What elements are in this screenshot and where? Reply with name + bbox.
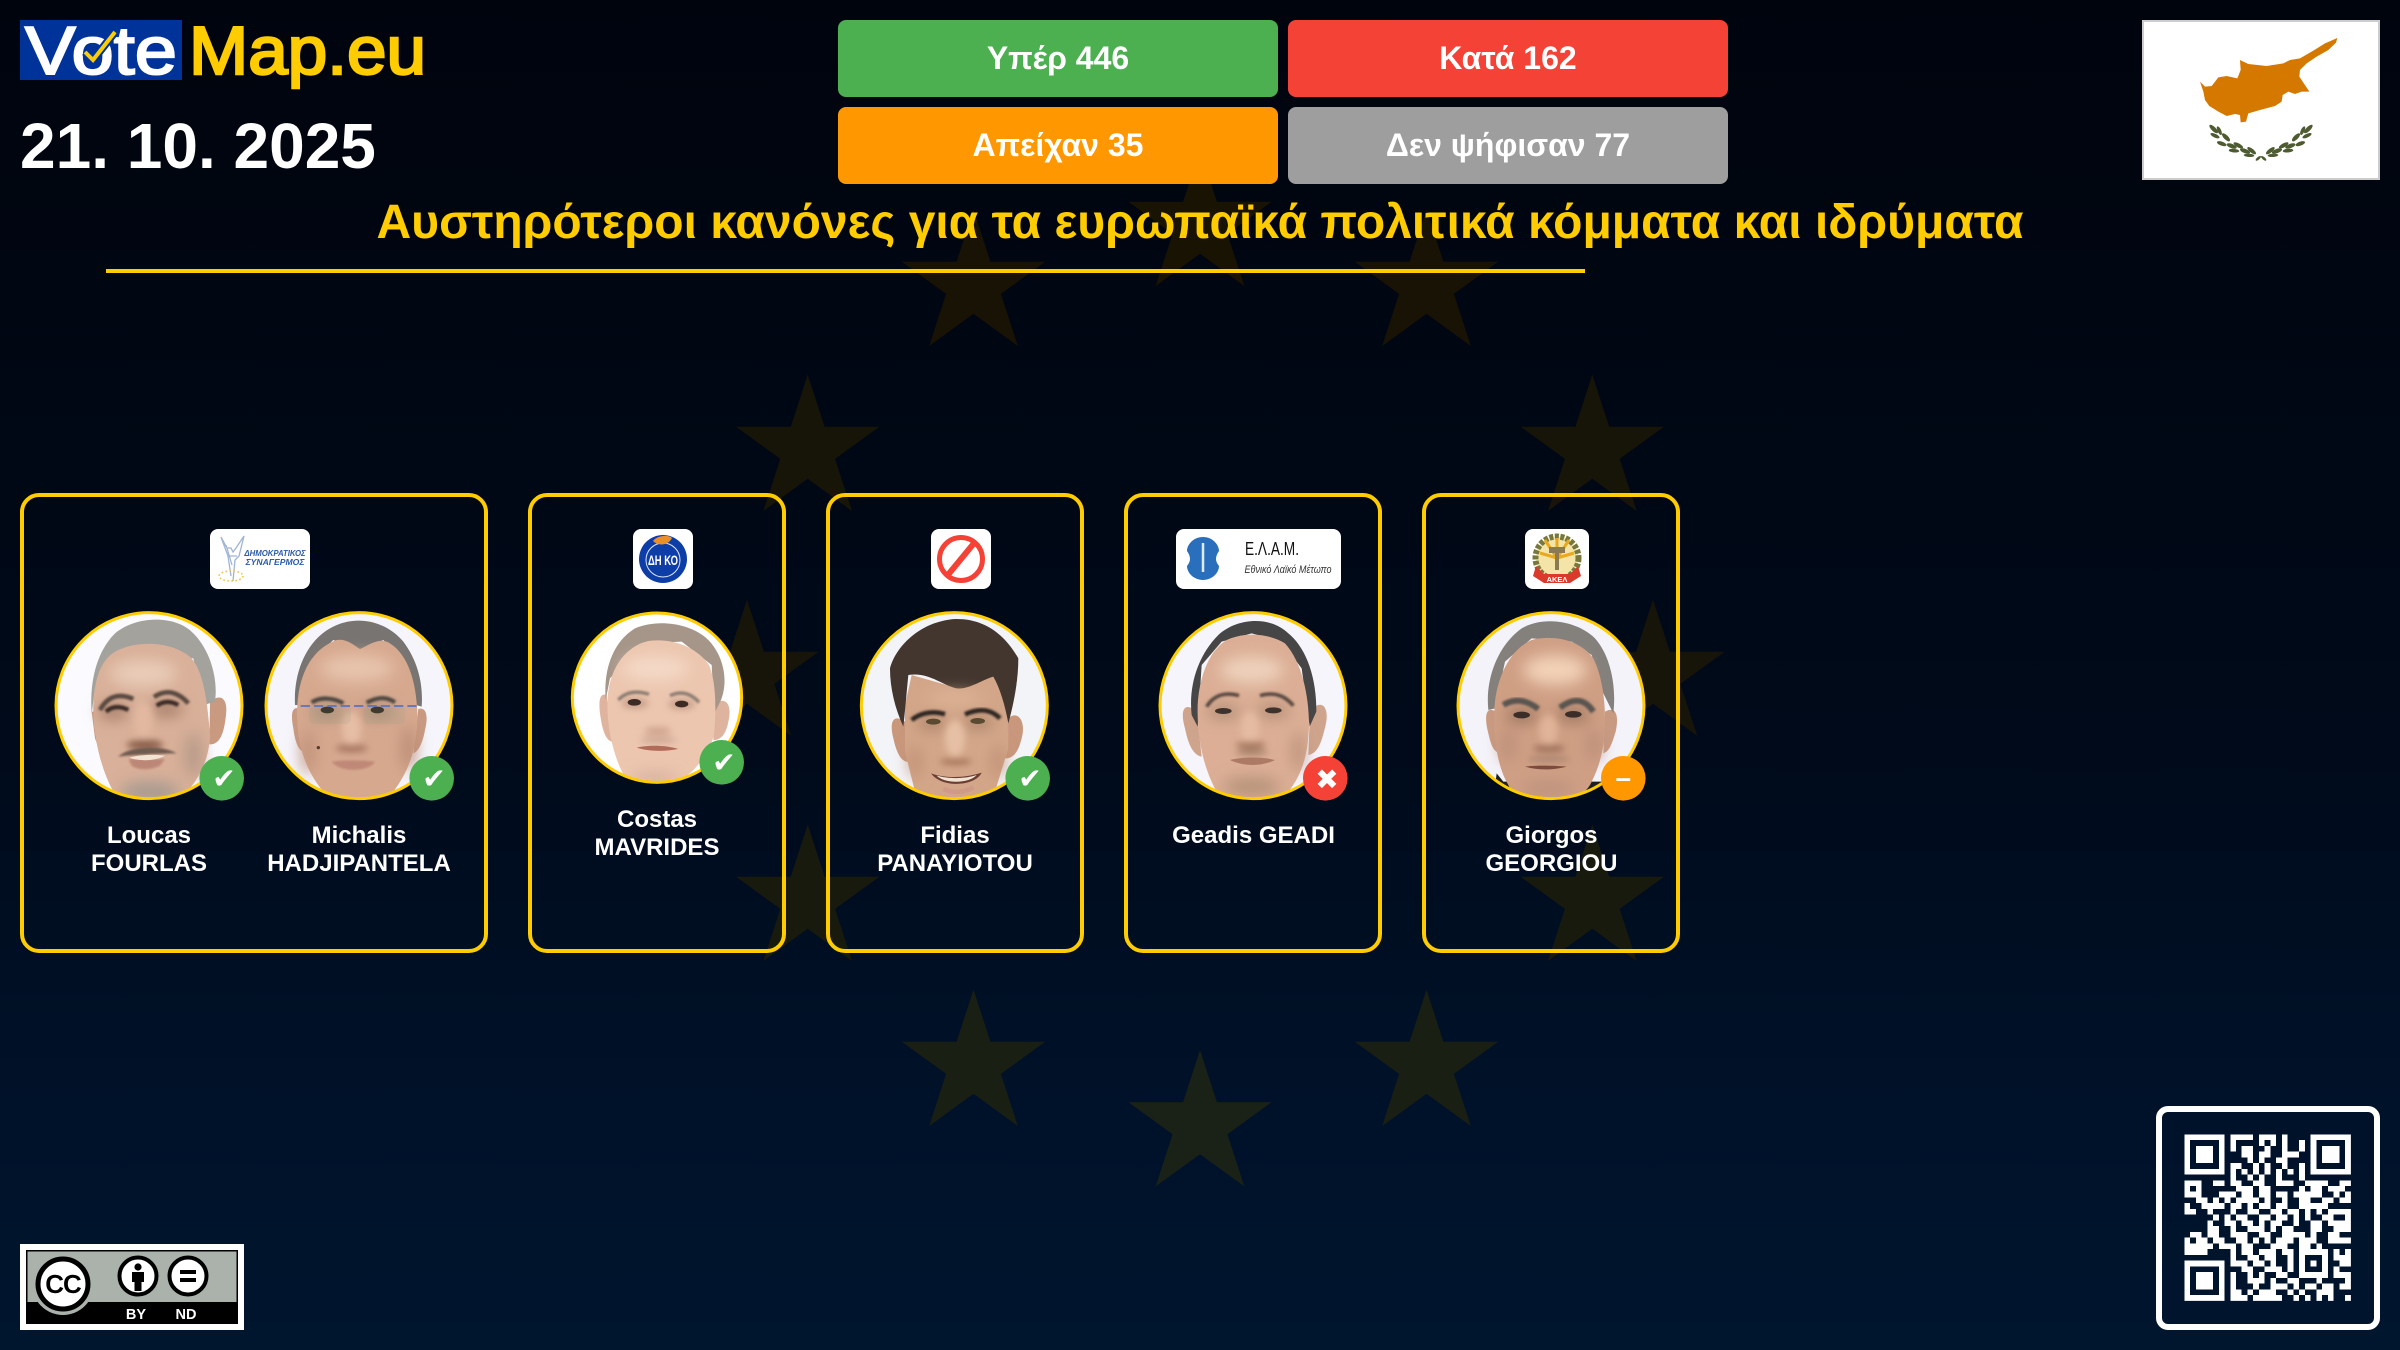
vote badge: for: ✔ [422,762,446,795]
name: Giorgos Georgiou: Giorgos [1505,822,1598,849]
total: against [1288,20,1728,97]
QR code [2159,1109,2377,1327]
vote badge: against: ✖ [1315,763,1339,796]
name: Loucas Fourlas: Loucas [107,822,191,849]
total: did not vote [1288,107,1728,184]
vote badge: against [1303,756,1348,801]
party logo: DISY [210,529,310,589]
licence badge: CC BY-ND: BY [126,1307,146,1323]
panel: Democratic Rally [22,495,486,951]
total: for: Υπέρ 446 [987,40,1129,76]
name: Michalis Hadjipantela: Michalis [312,822,406,849]
name: Fidias Panayiotou: Fidias [920,822,990,849]
total: did not vote: Δεν ψήφισαν 77 [1386,127,1630,163]
vote badge: for: ✔ [212,762,236,795]
party logo: no party symbol [931,529,991,589]
logo: VoteMap.eu: Map.eu [189,13,426,89]
party logo: AKEL: ΑΚΕΛ [1547,575,1567,584]
party logo: DIKO [633,529,693,589]
title: Αυστηρότεροι κανόνες για τα ευρωπαϊκά πολιτικά κόμματα και ιδρύματα [376,196,2024,249]
vote badge: abstained [1601,756,1646,801]
party logo: DISY: ΣΥΝΑΓΕΡΜΟΣ [245,557,305,567]
title rule [106,269,1585,273]
portrait: Michalis Hadjipantela [266,613,452,812]
name: Michalis Hadjipantela: HADJIPANTELA [267,850,451,877]
vote badge: for: ✔ [712,746,736,779]
portrait: Fidias Panayiotou [861,613,1047,804]
flag of Cyprus [2143,21,2379,179]
portrait: Geadis Geadi [1160,613,1346,805]
party logo: ELAM [1176,529,1341,589]
panel: AKEL [1424,495,1678,951]
party logo: DIKO: ΔΗ ΚΟ [648,552,678,568]
vote totals [838,20,1728,184]
total: abstained: Απείχαν 35 [973,127,1143,163]
logo: VoteMap.eu: Vote [25,13,177,89]
logo: VoteMap.eu [20,13,426,89]
name: Costas Mavrides: MAVRIDES [595,834,719,861]
name: Loucas Fourlas: FOURLAS [91,850,207,877]
total: for [838,20,1278,97]
party logo: DISY: ΔΗΜΟΚΡΑΤΙΚΟΣ [243,549,306,558]
total: against: Κατά 162 [1439,40,1577,76]
party logo: ELAM: Εθνικό Λαϊκό Μέτωπο [1244,564,1332,576]
name: Giorgos Georgiou: GEORGIOU [1485,850,1618,877]
vote badge: abstained: – [1616,762,1631,793]
vote badge: for [1005,756,1050,801]
vote badge: for [409,756,454,801]
date: 21. 10. 2025 [20,110,376,182]
name: Geadis Geadi: Geadis GEADI [1172,822,1335,849]
vote badge: for: ✔ [1018,762,1042,795]
vote badge: for [199,756,244,801]
name: Fidias Panayiotou: PANAYIOTOU [877,850,1033,877]
party logo: AKEL [1525,529,1589,589]
licence badge: CC BY-ND: CC [45,1269,82,1299]
panel: DIKO [530,495,784,951]
panel: non-attached [828,495,1082,951]
party logo: ELAM: Ε.Λ.Α.Μ. [1245,539,1299,559]
panel: ELAM [1126,495,1380,951]
background EU star circle [675,150,1725,1186]
licence badge: CC BY-ND [20,1244,244,1330]
total: abstained [838,107,1278,184]
licence badge: CC BY-ND: ND [176,1307,196,1323]
portrait: Costas Mavrides [572,613,742,786]
portrait: Loucas Fourlas [56,613,242,802]
name: Costas Mavrides: Costas [617,806,697,833]
portrait: Giorgos Georgiou [1458,613,1644,812]
vote badge: for [699,740,744,785]
